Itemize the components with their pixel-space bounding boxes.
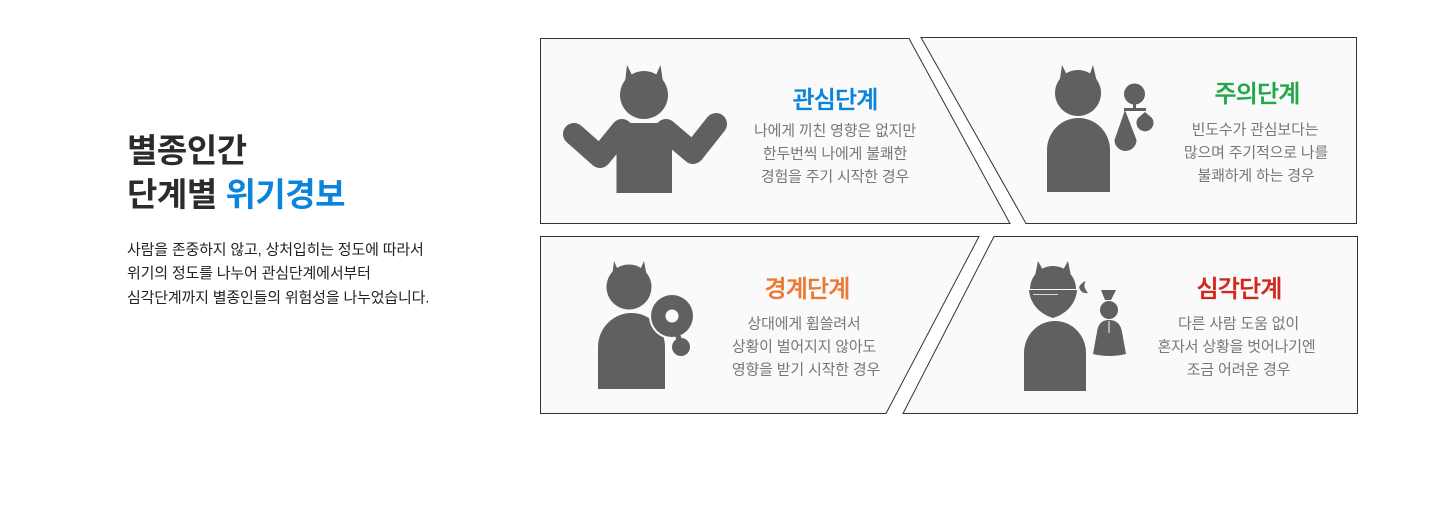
description text: 사람을 존중하지 않고, 상처입히는 정도에 따라서 — [127, 242, 424, 258]
body text: 빈도수가 관심보다는 — [1192, 122, 1319, 138]
body text: 한두번씩 나에게 불쾌한 — [763, 146, 908, 162]
icon: shrugging devil figure — [574, 65, 716, 193]
icon: devil figure with scale — [1047, 65, 1154, 192]
body text: 다른 사람 도움 없이 — [1178, 316, 1299, 332]
heading: 관심단계: 관심단계 — [793, 87, 877, 114]
panel: 관심단계 — [540, 38, 1010, 224]
icon: devil figure with alert sign — [598, 261, 695, 389]
body text: 조금 어려운 경우 — [1187, 362, 1291, 378]
body text: 불쾌하게 하는 경우 — [1197, 168, 1315, 184]
body text: 영향을 받기 시작한 경우 — [732, 362, 881, 378]
body text: 혼자서 상황을 벗어나기엔 — [1158, 338, 1315, 356]
body text: 경험을 주기 시작한 경우 — [761, 168, 910, 186]
description text — [127, 242, 429, 306]
body text — [732, 316, 881, 378]
title — [127, 132, 345, 213]
body text: 나에게 끼친 영향은 없지만 — [754, 122, 916, 140]
heading: 주의단계: 주의단계 — [1215, 81, 1299, 108]
body text — [754, 122, 916, 186]
heading: 경계단계: 경계단계 — [765, 276, 849, 303]
panel: 주의단계 — [921, 38, 1356, 224]
body text: 상황이 벌어지지 않아도 — [732, 338, 877, 356]
body text — [1184, 122, 1329, 184]
description text: 위기의 정도를 나누어 관심단계에서부터 — [127, 265, 371, 282]
panel: 경계단계 — [540, 236, 979, 414]
panel: 심각단계 — [903, 236, 1358, 414]
body text — [1158, 316, 1315, 378]
body text: 상대에게 휩쓸려서 — [747, 316, 861, 332]
heading: 심각단계: 심각단계 — [1197, 276, 1281, 303]
title: 단계별 위기경보 — [127, 176, 345, 213]
body text: 많으며 주기적으로 나를 — [1184, 144, 1329, 162]
description text: 심각단계까지 별종인들의 위험성을 나누었습니다. — [127, 290, 429, 306]
title: 별종인간 — [127, 132, 247, 169]
icon: masked devil figure with bundle — [1024, 261, 1126, 391]
